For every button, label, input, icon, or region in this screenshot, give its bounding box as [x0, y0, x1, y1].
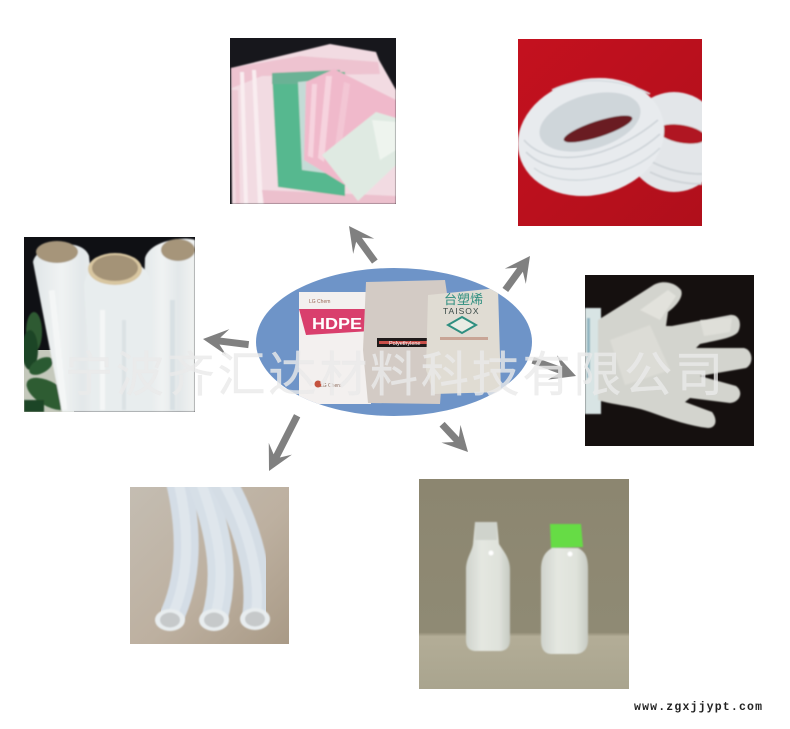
green cap — [550, 524, 583, 548]
photo: translucent tubes — [130, 480, 289, 644]
arrow: to gloves — [528, 348, 580, 388]
central ellipse with resin bags — [256, 268, 532, 416]
photo: plastic bottles — [419, 479, 629, 689]
HDPE bag: LG Chem — [309, 299, 330, 305]
arrow: to film rolls — [201, 326, 250, 358]
left bottle — [466, 522, 510, 651]
outer bag stack — [231, 44, 396, 204]
photo: plastic glove — [585, 275, 754, 446]
roll 3 — [140, 239, 195, 412]
glove hand — [598, 282, 751, 428]
photo: plastic bags — [230, 38, 396, 204]
roll 1 — [32, 244, 93, 412]
watermark: 宁波齐汇达材料科技有限公司 — [65, 349, 723, 402]
pink small stack — [304, 69, 396, 188]
front coil — [518, 77, 666, 197]
roll 2 — [90, 266, 146, 412]
site url: www.zgxjjypt.com — [634, 701, 762, 714]
photo: white wire coils on red — [518, 39, 702, 226]
arrow: to wire coils — [495, 248, 541, 298]
back coil — [638, 91, 702, 193]
photo: stretch film rolls — [21, 237, 195, 417]
TAISOX bag: 台塑烯 — [444, 292, 483, 307]
right bottle — [541, 548, 588, 654]
tube ends — [155, 609, 185, 631]
white-green sheet — [322, 112, 396, 201]
TAISOX bag — [426, 288, 501, 394]
TAISOX bag: TAISOX — [443, 306, 480, 316]
blue ellipse — [256, 268, 532, 416]
HDPE bag: LG Chem — [320, 383, 341, 389]
packaging tag — [585, 308, 601, 414]
arrow: to bottles — [433, 415, 478, 461]
leaves — [26, 312, 42, 352]
HDPE bag: HDPE — [312, 316, 362, 333]
cardboard cores — [36, 241, 78, 263]
green bag — [272, 72, 345, 196]
polyethylene bag: Polyethylene — [389, 341, 420, 347]
HDPE bag — [299, 292, 371, 404]
arrow: to bags — [338, 218, 385, 269]
arrow: to tubes — [257, 410, 309, 477]
polyethylene bag — [363, 280, 454, 404]
pale sheet behind small stack — [297, 80, 326, 174]
